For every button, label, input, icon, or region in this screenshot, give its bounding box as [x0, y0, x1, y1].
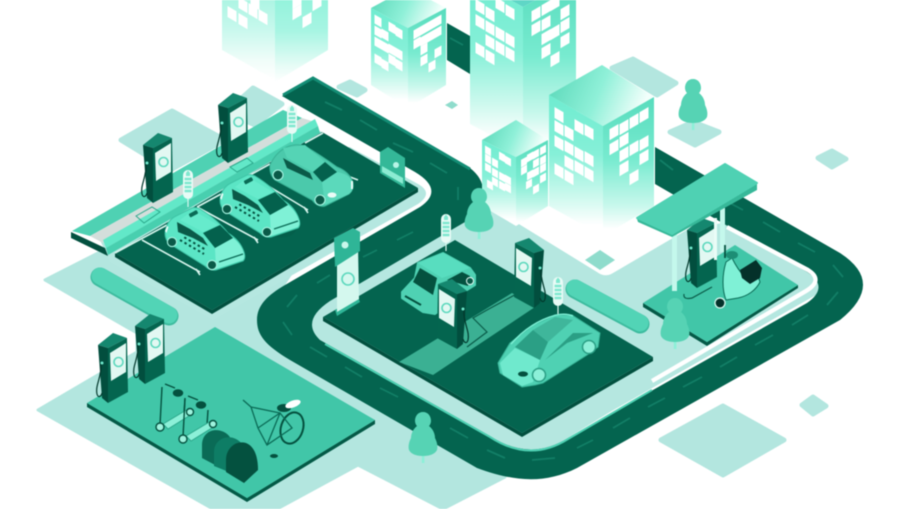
road: main ribbon: [257, 77, 863, 479]
road: lane dashes: [283, 38, 843, 460]
charging bay band: [399, 293, 535, 375]
e-scooter two: [179, 396, 216, 443]
charger: scooter station: [686, 218, 717, 288]
pill: central planter: [575, 288, 640, 324]
building: top left tower: [222, 0, 328, 82]
battery indicator: parking right: [287, 105, 297, 142]
panel: parking lot with taxis: [71, 110, 426, 320]
tree: top right: [679, 79, 707, 130]
bicycle: [243, 398, 307, 458]
charger: parking left: [142, 133, 173, 203]
panel: central charging lot: [323, 240, 653, 437]
battery indicator: central right: [553, 277, 563, 314]
ground: small tiles: [445, 101, 615, 270]
bicycle racks: [202, 430, 258, 483]
charger: central front: [437, 279, 468, 349]
battery indicator: parking left: [183, 170, 193, 207]
totem: charging sign: [334, 228, 360, 316]
tree: by the road bend: [465, 188, 493, 239]
road: bright edges: [283, 78, 816, 451]
car: taxi two: [216, 174, 306, 248]
scooter: [715, 245, 762, 308]
ground: pale plates behind parking: [121, 59, 846, 475]
parking lines: [115, 133, 358, 275]
building: second tower: [371, 0, 446, 108]
charger: central back: [514, 238, 545, 308]
ground: pale base left and lower plates: [38, 240, 505, 509]
car: taxi one: [161, 207, 251, 281]
sidewalk strips: [71, 110, 320, 256]
charger: parking right: [217, 93, 248, 163]
panel: scooter station: [643, 245, 798, 346]
building: large front tower: [549, 65, 654, 236]
pill: left planter: [100, 276, 169, 316]
sign: parking board: [380, 147, 405, 188]
road: back segment: [447, 23, 470, 74]
building: tall tower: [470, 0, 576, 152]
building: small front tower: [482, 120, 548, 226]
panel: bike and scooter lot: [87, 327, 375, 502]
charger: bike lot left: [97, 333, 128, 403]
car: teal hatchback: [270, 145, 353, 206]
tree: bottom: [409, 412, 437, 463]
e-scooter one: [156, 384, 194, 431]
charger: bike lot right: [134, 314, 165, 384]
car: front hatchback: [402, 253, 475, 314]
canopy: charging station roof: [637, 164, 757, 291]
car: sedan: [498, 314, 600, 387]
battery indicator: central left: [441, 214, 451, 251]
tree: scooter station: [661, 298, 689, 349]
ground: pale plate inside road ring: [300, 205, 830, 464]
